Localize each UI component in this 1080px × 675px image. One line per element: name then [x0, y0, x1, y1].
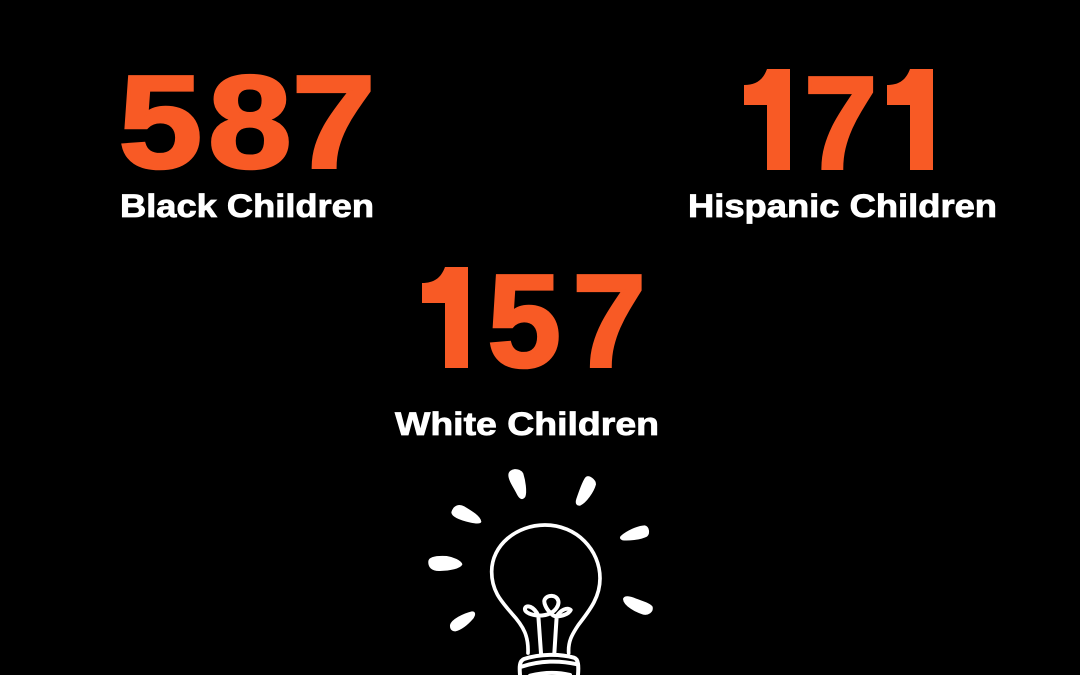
icon: light bulb — [429, 470, 652, 675]
label: Hispanic Children: Hispanic Children — [688, 188, 997, 224]
number: 157: 5 — [488, 248, 561, 394]
stat: 171 Hispanic Children — [688, 50, 997, 224]
bulb base — [520, 655, 578, 675]
number: 157: 1 — [417, 248, 490, 394]
label: White Children: White Children — [395, 406, 659, 442]
number: 587: 587 — [119, 48, 376, 195]
stat: 157 White Children — [395, 248, 659, 442]
number: 157: 7 — [572, 248, 646, 394]
number: 171: 171 — [739, 50, 955, 196]
label: Black Children: Black Children — [120, 188, 374, 224]
bulb outline — [492, 525, 600, 653]
stat: 587 Black Children — [119, 48, 376, 224]
light rays — [429, 470, 652, 631]
filament — [525, 596, 571, 653]
